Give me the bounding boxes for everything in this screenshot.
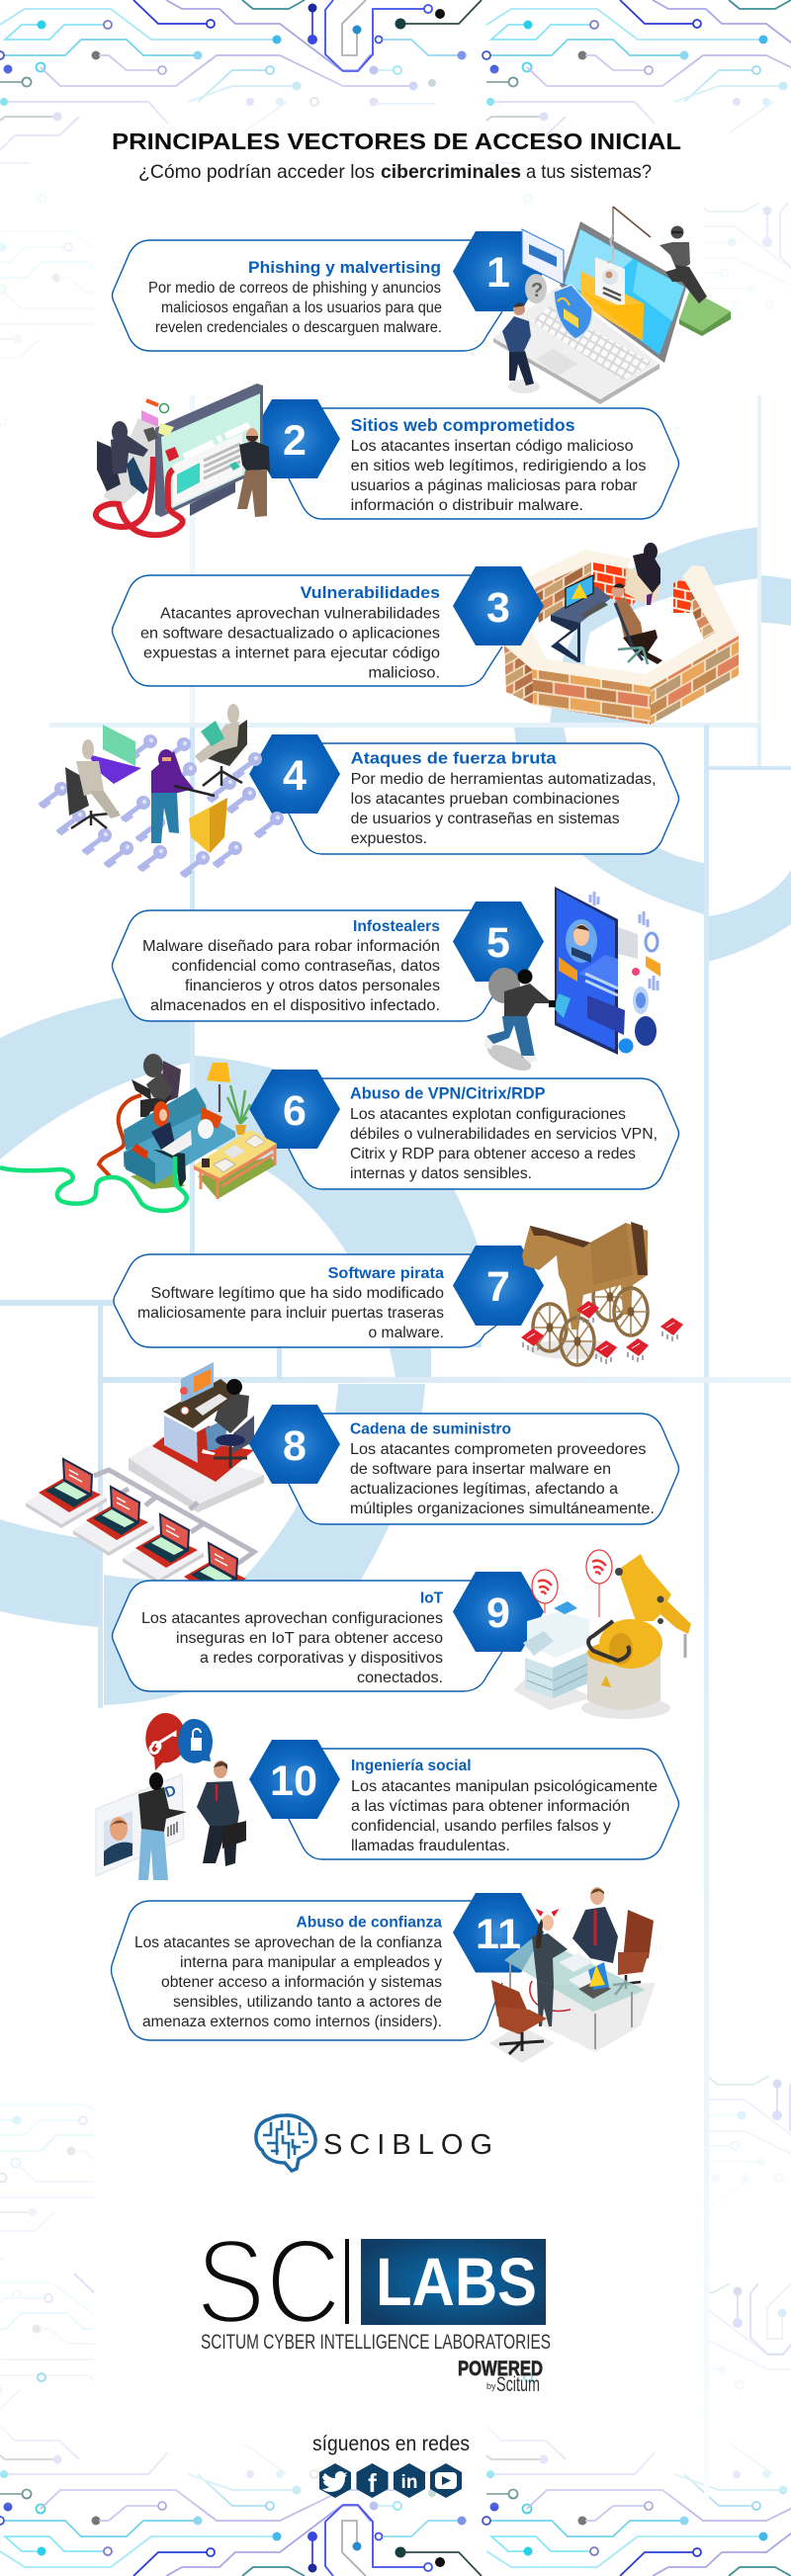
number hexagon 6 — [249, 1070, 340, 1149]
icon: remote worker on sofa — [0, 1054, 277, 1211]
heading: infostealers: Infostealers — [353, 918, 440, 935]
text block: abuso de confianza: amenaza externos como internos (insiders). — [142, 2014, 442, 2030]
text block: software pirata: o malware. — [368, 1325, 444, 1341]
text block: abuso de confianza — [134, 1934, 442, 2030]
powered by — [458, 2358, 543, 2396]
text block: vulnerabilidades: en software desactualizado o aplicaciones — [140, 626, 440, 643]
text block: ingeniería social — [351, 1778, 658, 1854]
text block: phishing: Por medio de correos de phishing y anuncios — [148, 280, 441, 297]
number hexagon 3 — [453, 566, 544, 645]
text block: VPN — [350, 1106, 658, 1182]
subtitle: ¿Cómo podrían acceder los — [138, 161, 375, 183]
panel: 11 abuso de confianza — [111, 1887, 656, 2063]
icon: laptop phishing — [493, 207, 731, 404]
icon: linkedin: in — [401, 2472, 417, 2493]
text block: software pirata — [137, 1285, 444, 1341]
text block: software pirata: Software legítimo que ha sido modificado — [150, 1285, 444, 1302]
panel: 4 ataques de fuerza bruta — [40, 704, 678, 877]
labs box: LABS — [376, 2244, 537, 2320]
heading: fuerza bruta: Ataques de fuerza bruta — [351, 749, 557, 768]
logo: sciblog — [256, 2115, 492, 2171]
panel: 3 vulnerabilidades — [113, 543, 739, 725]
icon: phone data thief — [483, 887, 660, 1075]
text block: ingeniería social: llamadas fraudulentas. — [351, 1838, 510, 1854]
text block: cadena: Los atacantes comprometen proveedores — [350, 1441, 647, 1458]
text block: ingeniería social: a las víctimas para obtener información — [351, 1798, 630, 1815]
heading: software pirata: Software pirata — [328, 1265, 444, 1282]
number hexagon 9: 9 — [486, 1589, 510, 1637]
text block: fuerza bruta — [351, 771, 657, 847]
text block: sitios web: información o distribuir malware. — [351, 497, 583, 514]
powered by: POWERED — [458, 2358, 543, 2380]
number hexagon 4 — [249, 734, 340, 814]
icon: social engineering — [96, 1713, 246, 1880]
text block: sitios web: usuarios a páginas maliciosas para robar — [351, 477, 638, 494]
text block: cadena: múltiples organizaciones simultáneamente. — [350, 1501, 655, 1517]
text block: VPN: débiles o vulnerabilidades en servicios VPN, — [350, 1126, 658, 1143]
icon: facebook — [356, 2463, 388, 2498]
heading: ingeniería social: Ingeniería social — [351, 1758, 471, 1774]
icon: printer and robot — [513, 1550, 691, 1719]
text block: vulnerabilidades — [140, 606, 440, 682]
heading: vulnerabilidades: Vulnerabilidades — [301, 583, 440, 602]
number hexagon 5: 5 — [486, 919, 510, 967]
heading: VPN: Abuso de VPN/Citrix/RDP — [350, 1085, 546, 1103]
text block: software pirata: maliciosamente para incluir puertas traseras — [137, 1305, 444, 1322]
icon: brain — [256, 2115, 315, 2171]
number hexagon 1: 1 — [486, 249, 510, 297]
panel: 7 software pirata — [114, 1222, 683, 1365]
text block: cadena: de software para insertar malware en — [350, 1461, 611, 1478]
text block: IoT: Los atacantes aprovechan configuraciones — [141, 1610, 443, 1627]
number hexagon 8 — [249, 1405, 340, 1484]
subtitle — [138, 161, 652, 183]
social follow label: síguenos en redes — [312, 2433, 470, 2455]
number hexagon 3: 3 — [486, 584, 510, 632]
text block: fuerza bruta: Por medio de herramientas automatizadas, — [351, 771, 657, 788]
text block: phishing: maliciosos engañan a los usuarios para que — [161, 300, 442, 316]
text block: infostealers — [142, 938, 440, 1014]
text block: vulnerabilidades: Atacantes aprovechan vulnerabilidades — [160, 606, 440, 623]
number hexagon 1 — [453, 231, 544, 311]
text block: infostealers: Malware diseñado para robar información — [142, 938, 440, 955]
text block: VPN: Citrix y RDP para obtener acceso a redes — [350, 1146, 636, 1162]
title: PRINCIPALES VECTORES DE ACCESO INICIAL — [112, 129, 681, 154]
icon: laptop phishing: ? — [531, 280, 543, 301]
text block: IoT — [141, 1610, 443, 1686]
heading: sitios web: Sitios web comprometidos — [351, 415, 575, 435]
text block: infostealers: confidencial como contraseñas, datos — [172, 958, 440, 975]
wordmark SC: SC — [196, 2214, 341, 2349]
text block: fuerza bruta: expuestos. — [351, 830, 427, 847]
icon: insider handshake — [489, 1887, 656, 2063]
subtitle: cibercriminales — [381, 161, 521, 183]
subtitle: a tus sistemas? — [526, 161, 652, 183]
text block: vulnerabilidades: expuestas a internet para ejecutar código — [143, 645, 440, 662]
background circuit pattern bottom — [0, 2076, 791, 2576]
heading: abuso de confianza: Abuso de confianza — [297, 1914, 442, 1932]
text block: sitios web: Los atacantes insertan código malicioso — [351, 438, 634, 455]
text block: phishing — [148, 280, 442, 336]
text block: VPN: internas y datos sensibles. — [350, 1165, 532, 1182]
text block: abuso de confianza: sensibles, utilizando tanto a actores de — [173, 1994, 442, 2011]
social icons — [319, 2463, 462, 2498]
number hexagon 4: 4 — [283, 752, 307, 800]
heading: IoT: IoT — [420, 1590, 444, 1607]
background circuit pattern top — [0, 0, 791, 425]
number hexagon 11 — [453, 1893, 544, 1973]
number hexagon 10: 10 — [270, 1758, 317, 1805]
wordmark: SCIBLOG — [323, 2129, 492, 2161]
number hexagon 2: 2 — [283, 417, 307, 465]
panel: 1 phishing y malvertising — [113, 207, 731, 404]
text block: cadena — [350, 1441, 655, 1517]
icon: supply chain — [26, 1362, 264, 1612]
icon: twitter — [319, 2463, 351, 2498]
panel: 10 ingeniería social — [96, 1713, 678, 1880]
text block: fuerza bruta: los atacantes prueban combinaciones — [351, 791, 620, 808]
number hexagon 8: 8 — [283, 1422, 307, 1470]
text block: sitios web: en sitios web legítimos, redirigiendo a los — [351, 458, 647, 474]
panel: 2 sitios web comprometidos — [96, 384, 679, 535]
text block: ingeniería social: confidencial, usando perfiles falsos y — [351, 1818, 611, 1835]
text block: IoT: a redes corporativas y dispositivos — [200, 1650, 443, 1667]
logo: sci labs — [196, 2214, 551, 2396]
panel: 5 infostealers — [113, 887, 660, 1075]
text block: cadena: actualizaciones legítimas, afectando a — [350, 1481, 618, 1498]
text block: vulnerabilidades: malicioso. — [368, 665, 440, 682]
number hexagon 6: 6 — [283, 1087, 307, 1135]
text block: abuso de confianza: interna para manipular a empleados y — [180, 1954, 442, 1971]
divider — [345, 2239, 349, 2324]
text block: infostealers: almacenados en el dispositivo infectado. — [150, 997, 440, 1014]
text block: IoT: conectados. — [357, 1670, 443, 1686]
text block: fuerza bruta: de usuarios y contraseñas en sistemas — [351, 811, 620, 827]
icon: linkedin — [394, 2463, 425, 2498]
text block: infostealers: financieros y otros datos personales — [185, 978, 440, 994]
panel: 6 abuso VPN — [0, 1054, 678, 1211]
text block: IoT: inseguras en IoT para obtener acceso — [176, 1630, 443, 1647]
number hexagon 5 — [453, 902, 544, 982]
number hexagon 11: 11 — [476, 1911, 521, 1958]
powered by: by — [486, 2381, 496, 2391]
heading: phishing: Phishing y malvertising — [248, 258, 441, 277]
number hexagon 2 — [249, 399, 340, 478]
powered by: Scitum — [496, 2373, 540, 2396]
text block: VPN: Los atacantes explotan configuraciones — [350, 1106, 626, 1123]
icon: brick firewall — [494, 543, 739, 725]
tagline: SCITUM CYBER INTELLIGENCE LABORATORIES — [201, 2330, 551, 2354]
panel: 9 IoT — [113, 1550, 691, 1719]
icon: youtube — [430, 2463, 462, 2498]
text block: phishing: revelen credenciales o descarguen malware. — [155, 319, 442, 336]
text block: abuso de confianza: Los atacantes se aprovechan de la confianza — [134, 1934, 442, 1951]
panel: 8 cadena de suministro — [249, 1405, 678, 1524]
number hexagon 7: 7 — [486, 1263, 510, 1311]
number hexagon 9 — [453, 1572, 544, 1652]
icon: facebook: f — [368, 2468, 377, 2498]
text block: sitios web — [351, 438, 647, 514]
icon: monitor malware — [96, 384, 270, 535]
icon: social engineering: ID — [159, 1782, 179, 1803]
text block: abuso de confianza: obtener acceso a información y sistemas — [161, 1974, 442, 1991]
icon: keys and attackers — [40, 704, 284, 877]
text block: ingeniería social: Los atacantes manipulan psicológicamente — [351, 1778, 658, 1795]
number hexagon 7 — [453, 1245, 544, 1326]
number hexagon 10 — [249, 1740, 340, 1819]
heading: cadena de suministro: Cadena de suministro — [350, 1421, 511, 1438]
icon: trojan horse — [521, 1222, 683, 1365]
